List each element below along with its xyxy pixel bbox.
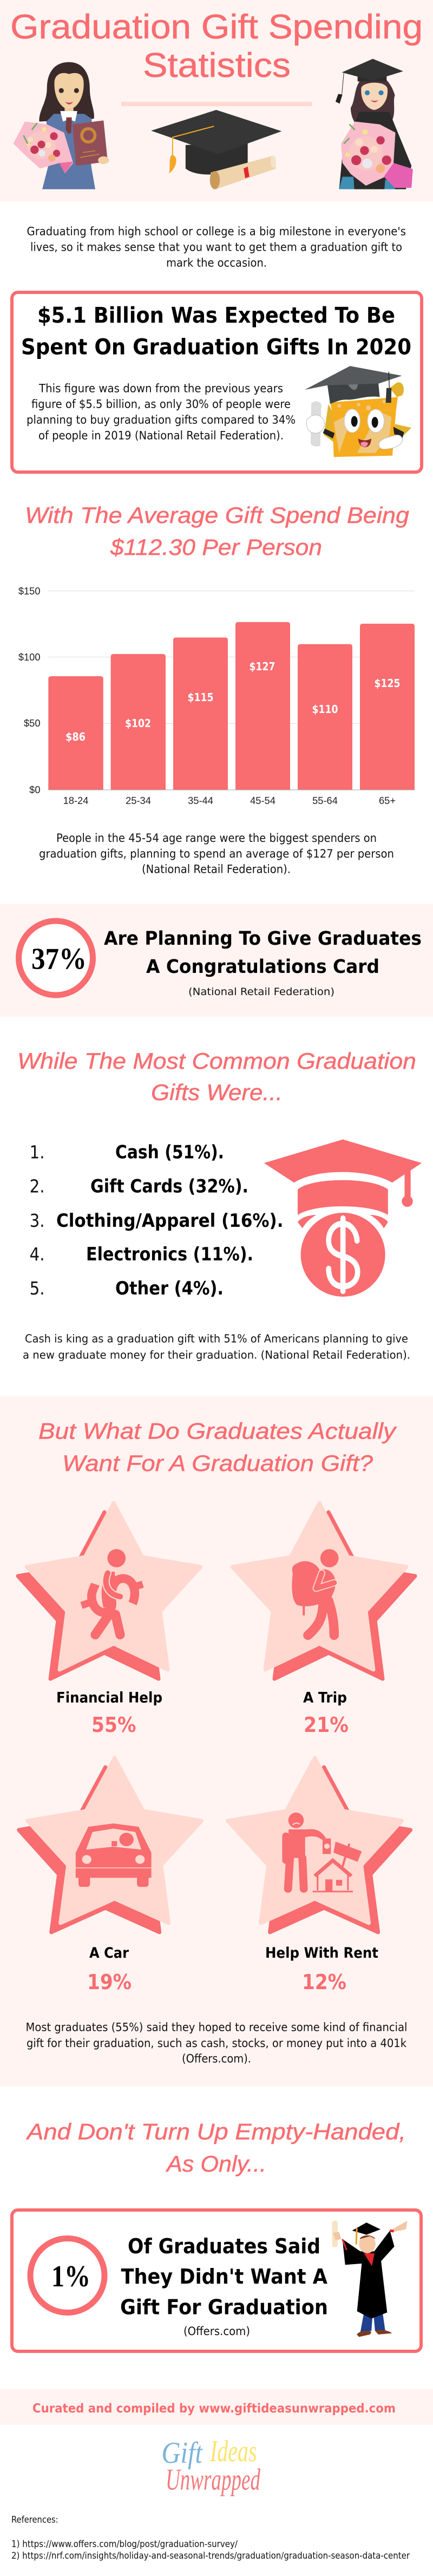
star card: a car	[19, 1758, 202, 1994]
bar values: $102	[125, 717, 151, 730]
bar values: $110	[312, 703, 338, 716]
star card: a trip	[232, 1503, 415, 1737]
stat text: They Didn't Want A	[121, 2265, 328, 2289]
wants caption text: (Offers.com).	[182, 2052, 251, 2065]
logo: Gift Ideas Unwrapped: Ideas	[209, 2435, 257, 2468]
references: 1) https://www.offers.com/blog/post/graduation-survey/	[11, 2539, 238, 2550]
x axis labels	[63, 795, 396, 806]
chart caption text: graduation gifts, planning to spend an average of $127 per person	[39, 847, 394, 860]
icon: backpacker	[292, 1549, 339, 1635]
footer band: credit line	[0, 2389, 433, 2425]
ranked gift list: 1.	[30, 1141, 45, 1163]
references	[11, 2514, 410, 2561]
ranked gift list	[30, 1141, 283, 1299]
bar values: $115	[187, 691, 213, 704]
panel: header	[0, 0, 433, 201]
title: Graduation Gift Spending	[10, 8, 423, 46]
heading: what graduates want: Want For A Graduation Gift?	[62, 1450, 373, 1476]
bar values: $86	[65, 730, 86, 743]
stat text: Of Graduates Said	[128, 2234, 320, 2258]
intro text: mark the occasion.	[166, 257, 267, 270]
callout body text: This figure was down from the previous years	[38, 382, 283, 395]
gifts caption text	[23, 1332, 410, 1361]
icon: car with driver	[76, 1823, 152, 1887]
x axis labels: 65+	[379, 795, 396, 806]
logo: Gift Ideas Unwrapped: Gift	[161, 2436, 203, 2470]
stat text: (National Retail Federation)	[188, 986, 334, 998]
label: financial help: Financial Help	[56, 1689, 162, 1707]
logo: Gift Ideas Unwrapped	[161, 2435, 261, 2497]
stat text: A Congratulations Card	[146, 956, 379, 978]
icon: graduate girl with cap and bouquet	[336, 59, 413, 189]
intro text	[27, 225, 406, 270]
chart caption text	[39, 832, 394, 876]
bar values	[65, 660, 401, 743]
value: 55%: 55%	[91, 1713, 136, 1737]
ranked gift list: Cash (51%).	[115, 1141, 224, 1163]
star card: financial help	[18, 1503, 201, 1737]
label: a trip: A Trip	[303, 1689, 347, 1707]
heading: empty-handed: As Only...	[165, 2151, 266, 2176]
ranked gift list: Clothing/Apparel (16%).	[56, 1210, 284, 1232]
stat text	[104, 928, 422, 998]
stat text	[120, 2234, 328, 2338]
callout body text: of people in 2019 (National Retail Federation).	[38, 429, 284, 442]
heading: most common gifts: Gifts Were...	[151, 1080, 283, 1105]
ranked gift list: Gift Cards (32%).	[90, 1176, 248, 1198]
value: 21%: 21%	[304, 1713, 349, 1737]
x axis labels: 18-24	[63, 795, 88, 806]
ranked gift list: Electronics (11%).	[86, 1244, 253, 1265]
y axis labels: $150	[18, 585, 40, 597]
heading: what graduates want	[38, 1418, 397, 1476]
heading: what graduates want: But What Do Graduates Actually	[38, 1418, 397, 1443]
ranked gift list: 2.	[30, 1176, 45, 1197]
stat text: (Offers.com)	[183, 2325, 250, 2338]
value: 12%: 12%	[302, 1970, 346, 1994]
panel: 1% callout	[12, 2210, 421, 2351]
chart caption text: People in the 45-54 age range were the biggest spenders on	[56, 832, 377, 845]
stat circle: 1%: 1%	[51, 2260, 90, 2293]
title: Statistics	[143, 47, 291, 84]
y axis labels: $100	[18, 651, 40, 663]
label: a car: A Car	[89, 1945, 129, 1962]
heading: average spend	[25, 502, 409, 560]
callout body text	[27, 382, 296, 442]
ranked gift list: 3.	[30, 1210, 45, 1231]
ranked gift list: 5.	[30, 1278, 45, 1299]
bars	[48, 622, 415, 790]
heading: most common gifts: While The Most Common Graduation	[17, 1048, 416, 1074]
callout heading: $5.1 Billion Was Expected To Be	[37, 303, 395, 328]
y axis labels: $50	[24, 717, 40, 729]
wants caption text: gift for their graduation, such as cash, stocks, or money put into a 401k	[27, 2037, 407, 2050]
icon: person paying rent on house	[286, 1813, 362, 1892]
chart caption text: (National Retail Federation).	[142, 863, 291, 876]
star card: help with rent	[228, 1758, 411, 1994]
ranked gift list: 4.	[30, 1244, 45, 1265]
label: help with rent: Help With Rent	[265, 1945, 378, 1962]
heading: most common gifts	[17, 1048, 416, 1105]
panel: what graduates want	[0, 1396, 433, 2087]
bar chart	[18, 585, 415, 806]
gifts caption text: Cash is king as a graduation gift with 51% of Americans planning to give	[25, 1332, 408, 1345]
x axis labels: 25-34	[126, 795, 151, 806]
footer band: credit line: Curated and compiled by www.giftideasunwrapped.com	[32, 2402, 396, 2416]
intro text: Graduating from high school or college is a big milestone in everyone's	[27, 225, 406, 238]
y axis labels	[18, 585, 40, 795]
icon: gift box mascot in graduation cap	[305, 366, 411, 457]
stat text: Gift For Graduation	[120, 2296, 328, 2319]
stat text: Are Planning To Give Graduates	[104, 928, 422, 950]
bar values: $127	[249, 660, 275, 673]
value: 19%: 19%	[87, 1970, 132, 1994]
x axis labels: 55-64	[312, 795, 338, 806]
heading: average spend: With The Average Gift Spend Being	[25, 502, 409, 528]
stat circle: 37%: 37%	[31, 942, 87, 976]
x axis labels: 35-44	[188, 795, 213, 806]
callout body text: figure of $5.5 billion, as only 30% of people were	[31, 397, 291, 410]
heading: empty-handed: And Don't Turn Up Empty-Handed,	[25, 2119, 406, 2144]
bar values: $125	[375, 677, 401, 690]
icon: dollar coin in graduation cap	[264, 1140, 422, 1297]
panel: 37% congratulations card	[0, 904, 433, 1017]
y axis labels: $0	[29, 784, 40, 795]
stat circle: 1%	[30, 2238, 104, 2313]
icon: graduate girl with book and bouquet	[13, 62, 109, 189]
logo: Gift Ideas Unwrapped: Unwrapped	[166, 2463, 261, 2497]
icon: person with dollar sign	[82, 1549, 143, 1634]
stat circle: 37%	[18, 921, 93, 995]
gifts caption text: a new graduate money for their graduation. (National Retail Federation).	[23, 1348, 410, 1361]
icon: mortarboard and diploma	[151, 110, 281, 189]
panel: $5.1 billion callout	[12, 292, 422, 472]
heading: empty-handed	[25, 2119, 406, 2176]
x axis labels: 45-54	[250, 795, 275, 806]
references: References:	[11, 2514, 58, 2525]
wants caption text: Most graduates (55%) said they hoped to receive some kind of financial	[26, 2021, 407, 2034]
intro text: lives, so it makes sense that you want to get them a graduation gift to	[30, 240, 402, 253]
heading: average spend: $112.30 Per Person	[110, 534, 322, 560]
callout heading	[21, 303, 411, 359]
ranked gift list: Other (4%).	[115, 1278, 224, 1299]
wants caption text	[26, 2021, 407, 2065]
icon: cheering graduate	[332, 2221, 408, 2337]
title	[10, 8, 423, 84]
callout heading: Spent On Graduation Gifts In 2020	[21, 335, 411, 359]
callout body text: planning to buy graduation gifts compared to 34%	[27, 414, 296, 427]
